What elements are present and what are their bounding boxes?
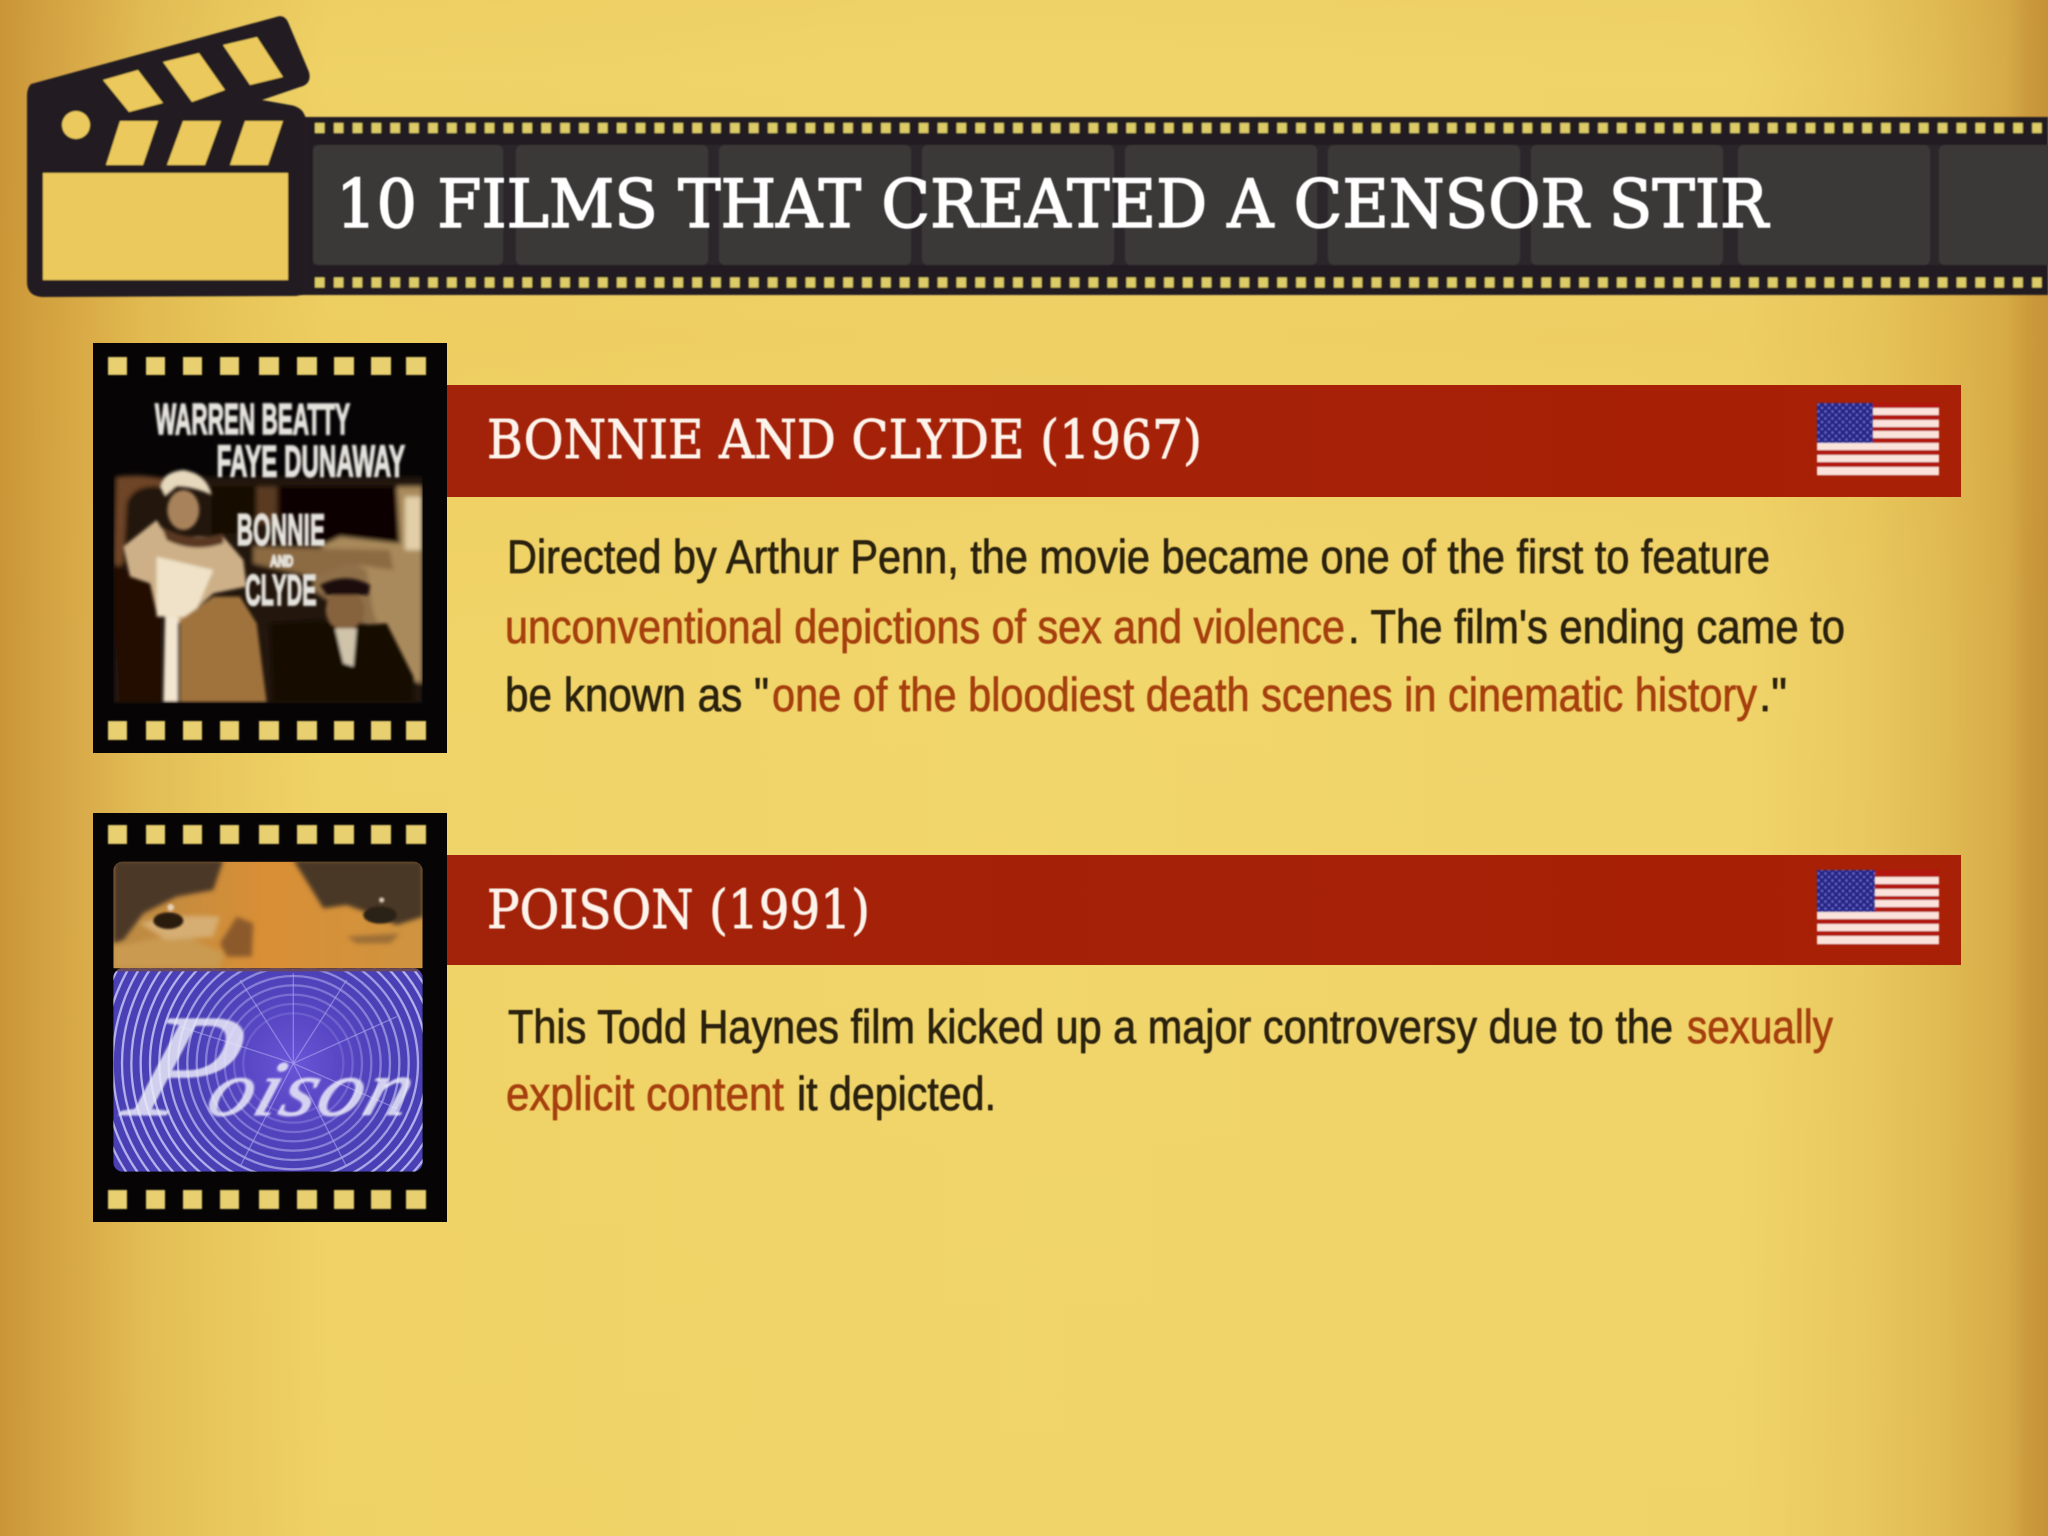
film thumbnail: Poison poster: [93, 813, 447, 1222]
film thumbnail: Bonnie and Clyde poster: [93, 343, 447, 753]
film description: sexually: [1687, 1000, 1833, 1053]
icon: US flag: [1817, 403, 1939, 476]
panel: Bonnie and Clyde: [93, 343, 1961, 753]
film description: [505, 530, 1845, 721]
heading: BONNIE AND CLYDE (1967): [487, 410, 1202, 471]
spiral panel: [113, 968, 423, 1172]
icon: clapperboard: [27, 16, 310, 297]
title: 10 FILMS THAT CREATED A CENSOR STIR: [336, 166, 1770, 243]
film description: explicit content: [506, 1067, 784, 1120]
eyes panel: [113, 860, 423, 968]
poster text: CLYDE: [245, 567, 317, 615]
poster text: BONNIE: [237, 506, 325, 555]
film sprockets: [108, 825, 426, 1209]
icon: US flag: [1817, 870, 1939, 945]
poster artwork: [113, 862, 423, 1172]
film description: . The film's ending came to: [1348, 600, 1845, 653]
poster text: [155, 396, 405, 615]
film description: This Todd Haynes film kicked up a major controversy due to the: [508, 1000, 1673, 1053]
film description: unconventional depictions of sex and violence: [505, 600, 1345, 653]
poster text: AND: [270, 554, 293, 571]
film description: [506, 1000, 1833, 1120]
film description: Directed by Arthur Penn, the movie became one of the first to feature: [507, 530, 1770, 583]
film heading bar: [447, 855, 1961, 965]
poster script title: Poison: [109, 984, 448, 1147]
man: [270, 620, 413, 703]
header film strip: [300, 117, 2048, 295]
film description: one of the bloodiest death scenes in cinematic history: [772, 668, 1757, 721]
film heading bar: [447, 385, 1961, 497]
film description: it depicted.: [797, 1067, 996, 1120]
film sprockets: [108, 357, 426, 740]
woman: [123, 520, 247, 623]
film description: be known as ": [505, 668, 769, 721]
heading: POISON (1991): [487, 880, 870, 941]
poster text: FAYE DUNAWAY: [217, 438, 405, 487]
film description: .": [1759, 668, 1787, 721]
poster artwork: [113, 396, 423, 703]
panel: Poison: [93, 813, 1961, 1222]
poster text: WARREN BEATTY: [155, 396, 350, 444]
